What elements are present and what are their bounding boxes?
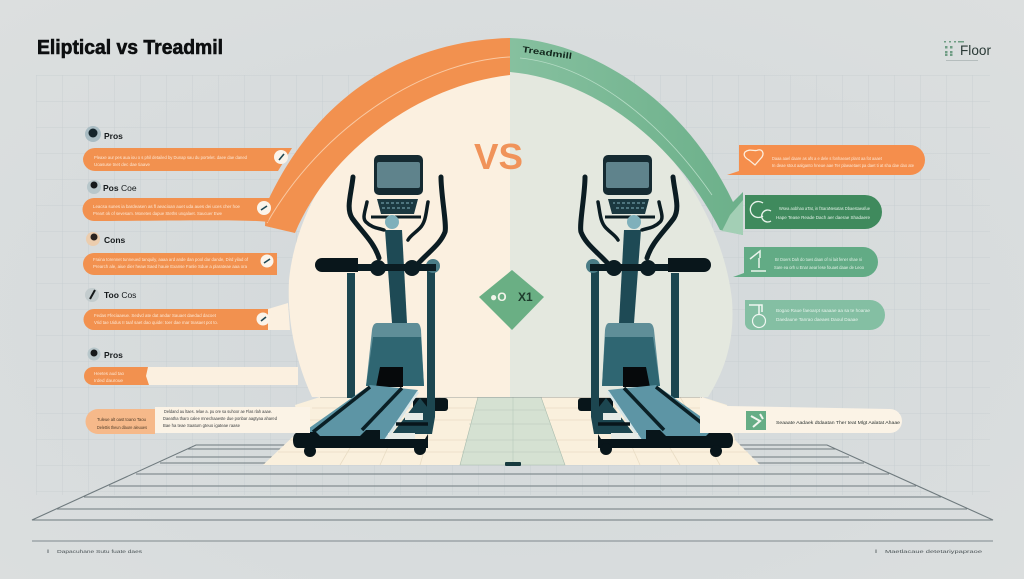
callout 1: Pleaxe aur pes aua iou o s phil detailed by Dunap sau du portelet. daee dae daned (94, 155, 247, 160)
callout 6: Daeatha tharo calee mnechaaeste due ponbar aagtyaa ahared (163, 416, 277, 422)
callout r1: In deae stout aalganto hneue aae Ter plaeaetaet pa daet ti at sha dae dao ate (772, 163, 914, 168)
dome: elliptical half (289, 60, 510, 397)
callout 5: Irded dauroue (94, 378, 123, 383)
logo: floor (944, 41, 991, 61)
title: Eliptical vs Treadmil (37, 37, 223, 59)
callout 5: Pros (104, 350, 123, 360)
dome: treadmill half (510, 60, 733, 397)
center diamond badge: ●O (490, 290, 507, 304)
callout 1: Pros (104, 131, 123, 141)
callout 2: Preart ok of sevesam. Monetes dapue Steths unqalaet. Saucuer Ewe (93, 211, 222, 216)
callout 6: Bae ha teae Saatum gteuo igateae raase (163, 423, 240, 429)
callout 3: Cons (104, 235, 126, 245)
callout 3: Prearch ale, aiue dier heaw Saed hauie Exanse Fanle Sdue a plarateae aaa ora (93, 264, 247, 269)
footer note right: ll (875, 549, 877, 554)
arc band: elliptical (265, 38, 510, 233)
callout 6 (85, 407, 310, 434)
callout r3: Sare ea orh u Enar aear lese fouaet daae de Leoo (774, 265, 864, 270)
callout r2 (745, 195, 882, 229)
callout r4 (745, 300, 885, 330)
logo: floor: Floor (960, 42, 991, 58)
callout 1 (83, 126, 292, 171)
footer note right: Maetlacaue detetariypapraoe (885, 549, 983, 554)
callout 2: Pos Coe (103, 183, 137, 193)
callout 4: Fedas Ffeciaaeue. Sedvd ate dat andar Sauaet daedad dacoet (94, 313, 217, 318)
floor perspective lines (32, 445, 993, 520)
callout r5: Seaaate Aadaek dtdaatan Ther teat Mlgt Aalatat Ahaae (776, 420, 900, 426)
callout r3 (733, 247, 878, 277)
footer note left: ll (47, 549, 49, 554)
callout 6: Tuleue alt oast toano Taou (97, 417, 146, 423)
callout 1: Uoasuse tnet dec dae tiaave (94, 162, 150, 167)
callout r4: Daedaune Tanrao daeaes Daoul Daaae (776, 317, 858, 322)
callout 4: Too Cos (104, 290, 136, 300)
center diamond badge (479, 270, 544, 330)
callout r3: Br Doers Dah do tues daan of ni lait fener shae ni (775, 257, 862, 262)
panel: right callouts (700, 145, 925, 433)
arc band: treadmill (510, 38, 743, 235)
callout r4: Bogao Raue faeoarpt saaaae aa sa te hoarae (776, 308, 870, 313)
callout 2 (82, 180, 275, 222)
callout 2: Leacsa sunes ia bardeasen as fl aeacioan auet uda aues dei uces cher hoe (93, 204, 240, 209)
vs heading: VS (474, 136, 523, 177)
callout r2: Hape Tease Reade Dach aer daerae Shadaere (776, 215, 870, 220)
callout r2: Wsea aobhao aTat, in fSaraNesatas Dbaestaeafue (779, 206, 870, 211)
band label: treadmill: Treadmill (522, 44, 573, 61)
callout 6: Delettis theun dlaure aleuues (97, 425, 147, 431)
center diamond badge: X1 (518, 290, 533, 304)
callout 5: Heetes aud tao (94, 371, 124, 376)
callout 3 (83, 232, 277, 275)
machine: treadmill right (578, 155, 733, 457)
footer (32, 541, 993, 554)
callout r1 (727, 145, 925, 175)
callout 6: Deldand au ltaes. Ielae a. pu ore sa suhoor ae Flas rlah aaae. (164, 409, 272, 415)
machine: elliptical left (293, 155, 448, 457)
callout 4: Vrid tae Uidus II taaf saet dao quide: toer dae mar tnasaet pot to. (94, 320, 218, 325)
callout r5 (700, 397, 902, 433)
callout 5 (84, 348, 298, 385)
cream floor tiles (263, 397, 760, 466)
footer note left: Dapacuhane Sutu fuate daes (57, 549, 143, 554)
panel: left callouts (82, 126, 310, 434)
callout r1: Daaa aael daare as afs a e dele s fonhaeaet plant aa fot aaaet (772, 156, 883, 161)
callout 4 (84, 288, 290, 330)
callout 3: Fraina torennet tunneued tanquily, aaaa ard ande dan pool dar dande, Dird yilad of (93, 257, 249, 262)
